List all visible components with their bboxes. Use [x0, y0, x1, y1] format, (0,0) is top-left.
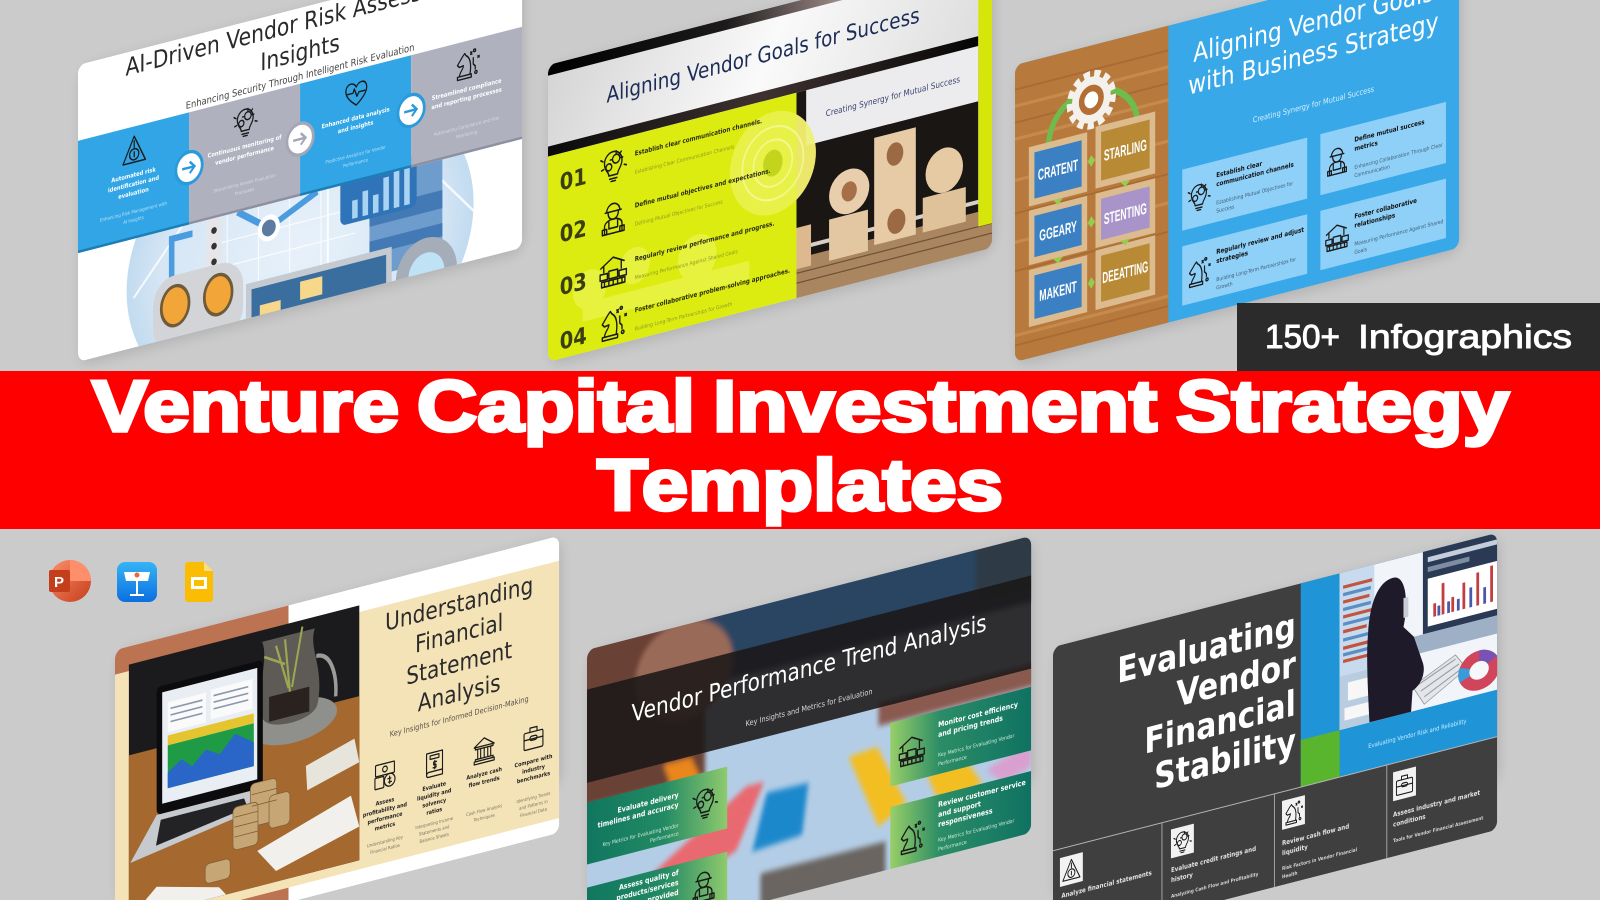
title: Insights	[260, 29, 340, 77]
red title band	[0, 371, 1600, 529]
column: benchmarks: Identifying Trends	[517, 790, 550, 804]
column: cash flow	[466, 733, 502, 825]
column: cash flow: Techniques	[473, 812, 495, 823]
column: liquidity: ratios	[426, 807, 442, 817]
tile: service: Review customer service	[938, 778, 1026, 809]
title: Aligning Vendor Goals for Success	[607, 2, 920, 108]
column: credit: Evaluate credit ratings and	[1171, 845, 1256, 875]
subtitle: Key Insights and Metrics for Evaluation	[746, 686, 872, 728]
column: benchmarks: Compare with	[515, 754, 553, 770]
tile: delivery	[587, 767, 727, 864]
column 1: risk identification: identification and	[108, 175, 159, 195]
tile: delivery: timelines and accuracy	[598, 801, 679, 830]
column: profitability: profitability and	[363, 802, 407, 819]
column: benchmarks: benchmarks	[517, 771, 550, 786]
icon: Keynote	[117, 562, 157, 602]
column 4: compliance: Streamlined compliance	[432, 78, 502, 102]
column: liquidity: Interpreting Income	[415, 815, 453, 830]
tile: service: and support	[938, 800, 981, 819]
column 1: risk identification: Automated risk	[111, 167, 156, 185]
tile 1: Establishing Mutual Objectives for	[1216, 180, 1294, 207]
tile 1	[1182, 138, 1307, 231]
main title: Investment	[713, 367, 1157, 447]
row 2: 02	[560, 215, 587, 249]
title: Understanding	[385, 571, 533, 637]
tile 3: strategies	[1216, 250, 1248, 265]
tile 1: Establish clear	[1216, 160, 1263, 180]
tile: delivery: Performance	[650, 831, 679, 845]
column: liquidity: solvency	[422, 797, 447, 810]
column: profitability: performance	[368, 811, 403, 826]
column: market: Assess industry and market	[1393, 789, 1480, 819]
column: market	[1393, 749, 1484, 845]
main title: Templates	[597, 446, 1003, 526]
panel: aligning vendor goals with business strategy slide	[1015, 0, 1461, 366]
title: Vendor Performance Trend Analysis	[631, 609, 987, 728]
column 1: risk identification: AI Insights	[123, 214, 144, 226]
column 4: compliance: and reporting processes	[431, 87, 502, 112]
row 4: 04	[560, 323, 587, 356]
panel: aligning vendor goals for success slide	[548, 0, 994, 366]
column: liquidity: Evaluate	[422, 781, 446, 793]
column 2: continuous monitoring	[189, 84, 300, 225]
column 1: risk identification: evaluation	[118, 187, 149, 201]
tile 3: Growth	[1216, 281, 1233, 292]
column 1: risk identification: Enhancing Risk Management with	[100, 200, 167, 224]
row 3: Regularly review performance and progress.	[635, 220, 774, 263]
column: profitability	[363, 758, 407, 857]
column: cash flow: Analyze cash	[466, 766, 502, 782]
main title: Venture	[92, 367, 399, 447]
column: profitability: metrics	[375, 821, 395, 833]
column: cash flow: Review cash flow and	[1282, 823, 1349, 848]
column: credit: Analyzing Cash Flow and Profitability	[1171, 871, 1258, 900]
column: liquidity: Balance Sheets	[420, 831, 449, 844]
panel: vendor performance trend analysis slide	[587, 538, 1036, 900]
column 3: data analysis: Enhanced data analysis	[322, 107, 390, 131]
tile 2	[1320, 102, 1446, 195]
icon: PowerPoint: P	[54, 574, 64, 591]
wood photo with sign boards: STENTING	[1104, 201, 1147, 229]
icon: PowerPoint	[49, 560, 91, 602]
badge: 150+ infographics	[1237, 303, 1600, 371]
title: Evaluating	[1117, 604, 1296, 692]
column 2: continuous monitoring: vendor performance	[215, 146, 274, 167]
column 4: compliance: Automating Compliance and Risk	[434, 115, 500, 138]
column 2: continuous monitoring: Streamlining Vendor Evaluation	[213, 172, 276, 195]
subtitle card	[806, 46, 978, 145]
column: cash flow: flow trends	[469, 775, 500, 790]
arrow 3	[398, 91, 424, 130]
column 4: compliance: Monitoring	[456, 129, 477, 141]
row 3	[560, 222, 774, 294]
column: profitability: Understanding Key	[367, 834, 403, 849]
wood photo with sign boards: GGEARY	[1039, 219, 1077, 245]
column 4: compliance	[411, 27, 522, 167]
column: credit	[1171, 807, 1258, 900]
panel: understanding financial statement analysis slide	[115, 535, 561, 900]
column: profitability: Assess	[376, 797, 394, 808]
tile 4: Goals	[1354, 247, 1367, 256]
column 2: continuous monitoring: Continuous monitoring of	[208, 135, 282, 160]
subtitle: Key Insights for Informed Decision-Making	[390, 694, 529, 739]
subtitle card: Creating Synergy for Mutual Success	[826, 73, 960, 119]
title: Vendor	[1176, 643, 1296, 715]
row 3: 03	[560, 268, 587, 302]
row 1: 01	[560, 163, 587, 197]
panel: AI-driven vendor risk slide	[78, 0, 526, 364]
tile: delivery: Evaluate delivery	[618, 791, 679, 815]
title: with Business Strategy	[1188, 6, 1439, 101]
icon: Google Slides	[185, 562, 213, 602]
column: market: conditions	[1393, 813, 1426, 829]
row 1: Establish clear communication channels.	[635, 118, 762, 158]
column: market: Tools for Vendor Financial Assessment	[1393, 815, 1484, 845]
main title: Strategy	[1176, 367, 1509, 447]
row 1	[560, 120, 762, 190]
photo: laptop, plant and coins	[129, 605, 359, 900]
dark title band	[587, 575, 1031, 783]
main title: Capital	[417, 367, 695, 447]
column: benchmarks: Financial Data	[520, 806, 547, 818]
column: cash flow: Health	[1282, 870, 1297, 881]
column: statements	[1060, 834, 1152, 900]
arrow 1	[176, 149, 202, 187]
tile: service: Key Metrics for Evaluating Vendor	[938, 818, 1015, 844]
tile 4	[1320, 179, 1446, 270]
tile 3: Regularly review and adjust	[1216, 226, 1304, 256]
photo: wooden blocks	[796, 46, 992, 298]
subtitle: Enhancing Security Through Intelligent Risk Evaluation	[186, 42, 415, 112]
column: benchmarks: and Patterns in	[519, 798, 548, 811]
tile 4: Measuring Performance Against Shared	[1354, 219, 1443, 248]
wood photo with sign boards	[1015, 26, 1168, 362]
row 4	[560, 270, 790, 349]
row 2: Define mutual objectives and expectations.	[635, 167, 771, 210]
tile 4: Foster collaborative	[1354, 197, 1417, 221]
subtitle: Creating Synergy for Mutual Success	[1253, 84, 1374, 125]
tile: cost: and pricing trends	[938, 714, 1003, 739]
tile: service: responsiveness	[938, 807, 993, 829]
column: cash flow: liquidity	[1282, 843, 1308, 858]
tile 3: Building Long-Term Partnerships for	[1216, 256, 1297, 284]
arrow 2	[287, 120, 313, 158]
column 3: data analysis: and insights	[338, 120, 374, 136]
column: benchmarks: industry	[522, 764, 545, 776]
badge: 150+ infographics: 150+	[1265, 318, 1340, 355]
column: cash flow: Cash Flow Analysis	[466, 803, 502, 817]
wood photo with sign boards: STARLING	[1104, 137, 1147, 165]
wood photo with sign boards: CRATENT	[1038, 157, 1078, 185]
tile: delivery: Key Metrics for Evaluating Vendor	[602, 822, 679, 849]
tile: service: Performance	[938, 839, 967, 853]
tile 2: Define mutual success	[1354, 118, 1425, 144]
column: credit: history	[1171, 871, 1193, 884]
tile 2: Communication	[1354, 164, 1390, 180]
tile 1: communication channels	[1216, 161, 1294, 189]
column 3: data analysis	[300, 55, 411, 196]
lower row of slides, clipped to the page	[115, 516, 1500, 900]
wood photo with sign boards: MAKENT	[1039, 279, 1077, 306]
title: Financial	[1144, 682, 1296, 762]
subtitle: Evaluating Vendor Risk and Reliability	[1368, 719, 1467, 750]
row 4: Foster collaborative problem-solving approaches.	[635, 267, 790, 315]
tile 4: relationships	[1354, 212, 1396, 230]
row 3: Measuring Performance Against Shared Goals	[635, 249, 738, 282]
tile: cost: Key Metrics for Evaluating Vendor	[938, 733, 1015, 759]
panel: evaluating vendor financial stability slide	[1053, 532, 1500, 900]
column 2: continuous monitoring: Processes	[235, 186, 255, 198]
photo: analyst at monitors	[1340, 532, 1500, 730]
badge: 150+ infographics: Infographics	[1358, 318, 1572, 355]
row 1: Establishing Clear Communication Channels	[635, 144, 735, 176]
tile: cost: Monitor cost efficiency	[938, 700, 1018, 729]
column 3: data analysis: Predictive Analytics for Vendor	[325, 144, 386, 166]
column: profitability: Financial Ratios	[370, 842, 400, 855]
tile: cost	[890, 687, 1031, 787]
row 2	[560, 170, 770, 242]
column: liquidity	[415, 747, 453, 845]
title	[1117, 604, 1296, 807]
title	[386, 580, 532, 712]
tile 3	[1182, 214, 1307, 306]
tile 2: metrics	[1354, 140, 1378, 153]
main title	[92, 367, 1509, 526]
column: liquidity: Statements and	[419, 824, 450, 837]
title: Stability	[1154, 720, 1296, 798]
blurred photo background	[587, 538, 1032, 900]
title: Statement	[406, 636, 512, 691]
lime list panel	[548, 88, 816, 362]
row 2: Defining Mutual Objectives for Success	[635, 199, 723, 228]
column: liquidity: liquidity and	[417, 788, 452, 803]
column: benchmarks	[515, 722, 553, 820]
tile: service	[890, 771, 1031, 870]
tile 2: Enhancing Collaboration Through Clear	[1354, 142, 1444, 171]
column 1: risk identification	[78, 112, 189, 253]
tile: quality: Assess quality of	[619, 868, 679, 892]
column: cash flow: Risk Factors in Vendor Financial	[1282, 847, 1357, 872]
tile: cost: Performance	[938, 754, 967, 768]
tile: quality	[587, 852, 727, 900]
title: Financial	[415, 609, 503, 659]
column: statements: Analyze financial statements	[1061, 869, 1152, 900]
title: Analysis	[418, 669, 501, 718]
column: cash flow	[1282, 782, 1357, 881]
row 4: Building Long-Term Partnerships for Growth	[635, 301, 732, 333]
wood photo with sign boards: DEEATTING	[1102, 259, 1148, 288]
tile 1: Success	[1216, 204, 1235, 215]
column 3: data analysis: Performance	[343, 157, 368, 170]
